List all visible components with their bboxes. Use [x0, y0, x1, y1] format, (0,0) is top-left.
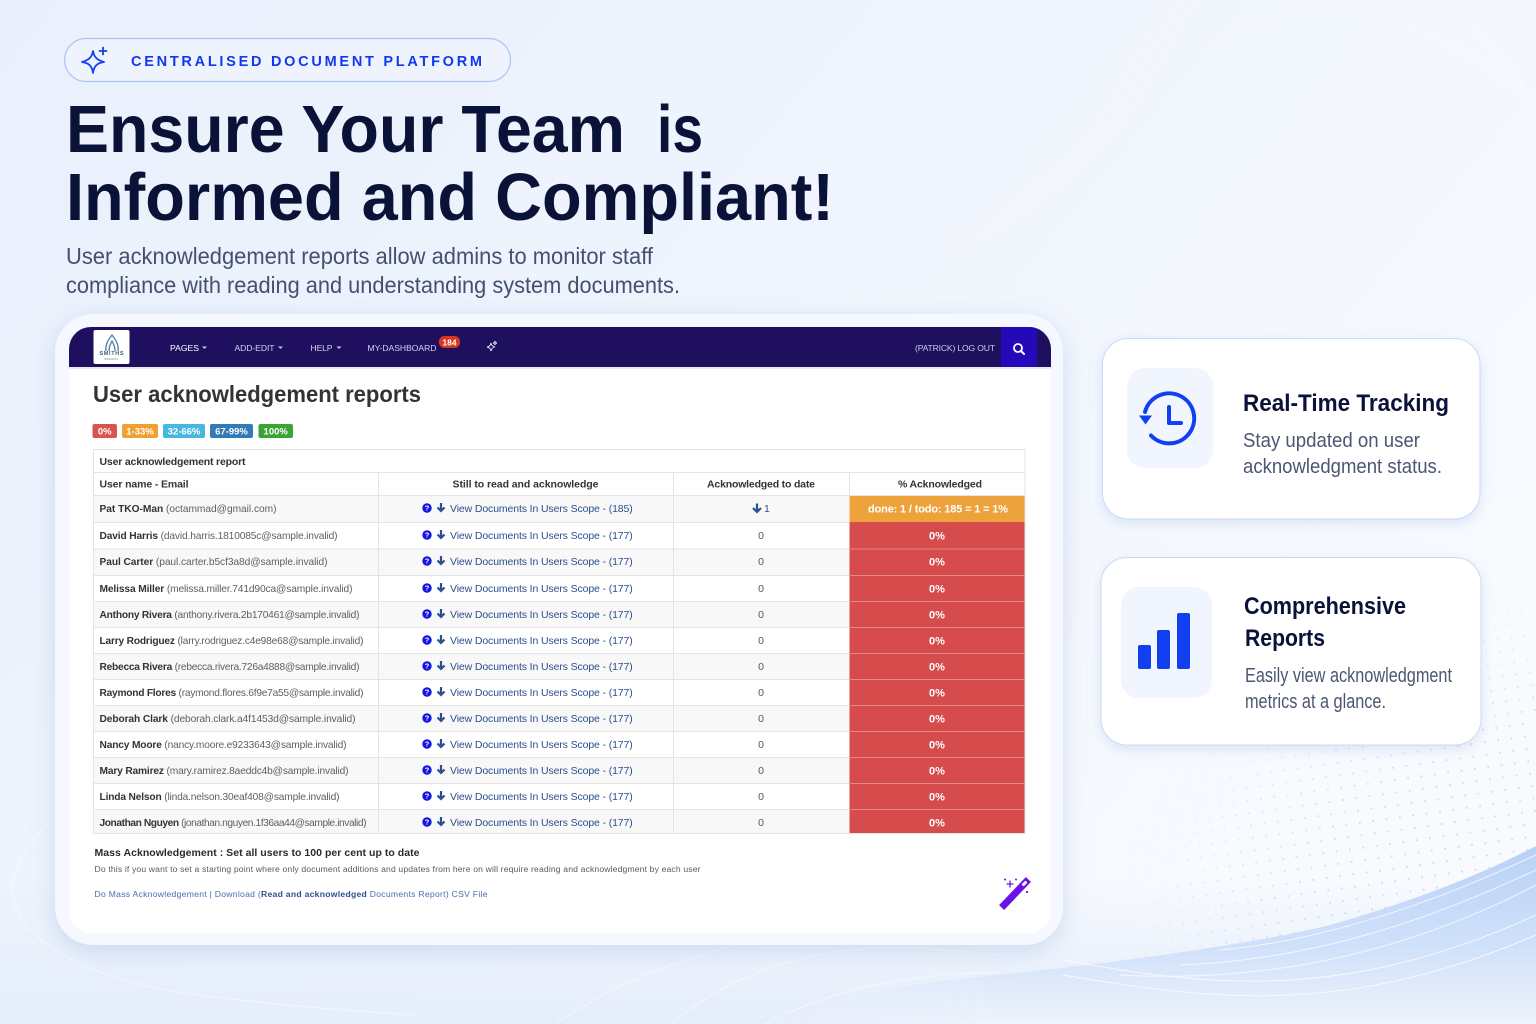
column: documents links: ?	[425, 557, 430, 566]
navbar	[69, 327, 1051, 369]
navbar: ADD-EDIT	[234, 343, 275, 353]
column: percent acknowledged: 0%	[929, 556, 945, 568]
column: documents links: View Documents In Users Scope - (177)	[450, 687, 633, 699]
column: percent acknowledged: 0%	[929, 636, 945, 648]
column: percent acknowledged: done: 1 / todo: 185 = 1 = 1%	[868, 504, 1008, 516]
column: users: Paul Carter (paul.carter.b5cf3a8d@sample.invalid)	[100, 557, 328, 568]
column: users	[100, 504, 366, 829]
card text: acknowledgment status.	[1243, 455, 1442, 478]
icon: bar chart	[1121, 587, 1212, 698]
card text: Real-Time Tracking	[1243, 390, 1449, 417]
column: documents links: ?	[425, 610, 430, 619]
column: percent acknowledged: 0%	[929, 530, 945, 542]
column: users: Deborah Clark (deborah.clark.a4f1453d@sample.invalid)	[100, 714, 356, 725]
table header: % Acknowledged	[898, 478, 982, 490]
table rows background	[93, 449, 1025, 834]
column: documents links: View Documents In Users Scope - (177)	[450, 661, 633, 673]
legend badges: 32-66%	[168, 426, 201, 438]
navbar: 184	[442, 338, 457, 348]
card text	[1243, 390, 1449, 478]
table: user acknowledgement report	[93, 449, 1025, 834]
mass acknowledgement section: Do Mass Acknowledgement | Download (Read and acknowledged Documents Report) CSV File	[94, 889, 488, 899]
column: percent acknowledged: 0%	[929, 584, 945, 596]
legend badges: 0%	[98, 426, 112, 438]
column: documents links: View Documents In Users Scope - (177)	[450, 635, 633, 647]
column: documents links	[422, 503, 633, 829]
column: acknowledged to date: 0	[758, 556, 764, 568]
column: documents links: ?	[425, 714, 430, 723]
column: users: Melissa Miller (melissa.miller.741d90ca@sample.invalid)	[100, 584, 352, 595]
column: acknowledged to date: 0	[758, 635, 764, 647]
column: documents links: ?	[425, 662, 430, 671]
column: users: Linda Nelson (linda.nelson.30eaf408@sample.invalid)	[100, 792, 340, 803]
column: percent acknowledged: 0%	[929, 688, 945, 700]
card: real-time tracking	[1102, 338, 1480, 519]
card text: metrics at a glance.	[1245, 690, 1386, 713]
icon: clock with back arrow	[1127, 368, 1213, 468]
card text: Comprehensive	[1244, 593, 1406, 620]
column: users: Anthony Rivera (anthony.rivera.2b170461@sample.invalid)	[100, 610, 360, 621]
column: users: David Harris (david.harris.1810085c@sample.invalid)	[100, 531, 338, 542]
column: users: Nancy Moore (nancy.moore.e9233643@sample.invalid)	[100, 740, 346, 751]
subtitle	[66, 243, 680, 298]
column: documents links: ?	[425, 766, 430, 775]
panel: report screenshot	[55, 314, 1063, 945]
card text	[1244, 593, 1452, 713]
legend badges	[92, 424, 293, 438]
column: acknowledged to date: 0	[758, 817, 764, 829]
column: users: Larry Rodriguez (larry.rodriguez.c4e98e68@sample.invalid)	[100, 636, 364, 647]
column: documents links: ?	[425, 792, 430, 801]
title: is	[657, 92, 703, 167]
column: acknowledged to date	[753, 503, 770, 829]
column: documents links: ?	[425, 504, 430, 513]
column: documents links: View Documents In Users Scope - (177)	[450, 530, 633, 542]
column: percent acknowledged: 0%	[929, 714, 945, 726]
table grid	[93, 450, 1025, 834]
column: acknowledged to date: 0	[758, 687, 764, 699]
navbar: MY-DASHBOARD	[368, 343, 436, 353]
mass acknowledgement section: Mass Acknowledgement : Set all users to 100 per cent up to date	[94, 847, 420, 859]
column: acknowledged to date: 0	[758, 661, 764, 673]
column: acknowledged to date: 0	[758, 739, 764, 751]
column: users: Raymond Flores (raymond.flores.6f9e7a55@sample.invalid)	[100, 688, 364, 699]
column: acknowledged to date: 0	[758, 713, 764, 725]
logo: SMITHS	[100, 351, 124, 357]
icon: magic wand	[1004, 878, 1028, 905]
title	[66, 92, 834, 235]
card text: Reports	[1245, 625, 1325, 652]
card text: Easily view acknowledgment	[1245, 664, 1452, 687]
column: users: Pat TKO-Man (octammad@gmail.com)	[100, 504, 276, 515]
subtitle: User acknowledgement reports allow admins to monitor staff	[66, 243, 653, 269]
column: documents links: View Documents In Users Scope - (177)	[450, 556, 633, 568]
table title: User acknowledgement report	[100, 456, 246, 468]
legend badges: 67-99%	[215, 426, 248, 438]
column: percent acknowledged: 0%	[929, 662, 945, 674]
column: percent acknowledged: 0%	[929, 818, 945, 830]
column: documents links: View Documents In Users Scope - (177)	[450, 583, 633, 595]
column: percent acknowledged: 0%	[929, 766, 945, 778]
heading: User acknowledgement reports	[93, 381, 421, 407]
column: acknowledged to date: 0	[758, 791, 764, 803]
column: acknowledged to date: 1	[764, 503, 770, 515]
mass acknowledgement section: Do this if you want to set a starting point where only document additions and updates from here on will require reading and acknowledgment by each user	[94, 864, 701, 874]
subtitle: compliance with reading and understanding system documents.	[66, 272, 680, 298]
logo: BREWING	[104, 357, 118, 361]
column: users: Rebecca Rivera (rebecca.rivera.726a4888@sample.invalid)	[100, 662, 360, 673]
column: documents links: ?	[425, 740, 430, 749]
logo	[94, 330, 130, 364]
navbar: (PATRICK) LOG OUT	[915, 343, 996, 353]
card: comprehensive reports	[1101, 558, 1481, 745]
column: documents links: View Documents In Users Scope - (177)	[450, 609, 633, 621]
column: documents links: ?	[425, 636, 430, 645]
mass acknowledgement section	[94, 847, 701, 899]
column: percent acknowledged: 0%	[929, 740, 945, 752]
table header: User name - Email	[100, 478, 189, 490]
column: acknowledged to date: 0	[758, 530, 764, 542]
column: percent acknowledged: 0%	[929, 610, 945, 622]
column: documents links: View Documents In Users Scope - (177)	[450, 713, 633, 725]
column: acknowledged to date: 0	[758, 765, 764, 777]
column: acknowledged to date: 0	[758, 609, 764, 621]
column: users: Jonathan Nguyen (jonathan.nguyen.1f36aa44@sample.invalid)	[100, 818, 366, 829]
table header: Acknowledged to date	[707, 478, 815, 490]
title: Ensure Your Team	[66, 92, 625, 167]
column: percent acknowledged: 0%	[929, 792, 945, 804]
column: documents links: ?	[425, 584, 430, 593]
badge: centralised document platform	[64, 38, 510, 82]
column: acknowledged to date: 0	[758, 583, 764, 595]
column: percent acknowledged	[868, 504, 1008, 830]
title: Informed and Compliant!	[66, 160, 834, 235]
column: users: Mary Ramirez (mary.ramirez.8aeddc4b@sample.invalid)	[100, 766, 348, 777]
column: documents links: View Documents In Users Scope - (177)	[450, 765, 633, 777]
table header	[100, 478, 982, 490]
navbar: PAGES	[170, 343, 199, 353]
column: documents links: View Documents In Users Scope - (177)	[450, 817, 633, 829]
badge label: CENTRALISED DOCUMENT PLATFORM	[131, 54, 482, 70]
card text: Stay updated on user	[1243, 429, 1420, 452]
icon: sparkle	[82, 48, 106, 73]
column: documents links: ?	[425, 531, 430, 540]
column: documents links: View Documents In Users Scope - (185)	[450, 503, 633, 515]
table header: Still to read and acknowledge	[452, 478, 599, 490]
column: documents links: ?	[425, 688, 430, 697]
column: documents links: View Documents In Users Scope - (177)	[450, 791, 633, 803]
column: documents links: View Documents In Users Scope - (177)	[450, 739, 633, 751]
navbar: HELP	[310, 343, 333, 353]
legend badges: 1-33%	[126, 426, 154, 438]
column: documents links: ?	[425, 818, 430, 827]
legend badges: 100%	[264, 426, 288, 438]
